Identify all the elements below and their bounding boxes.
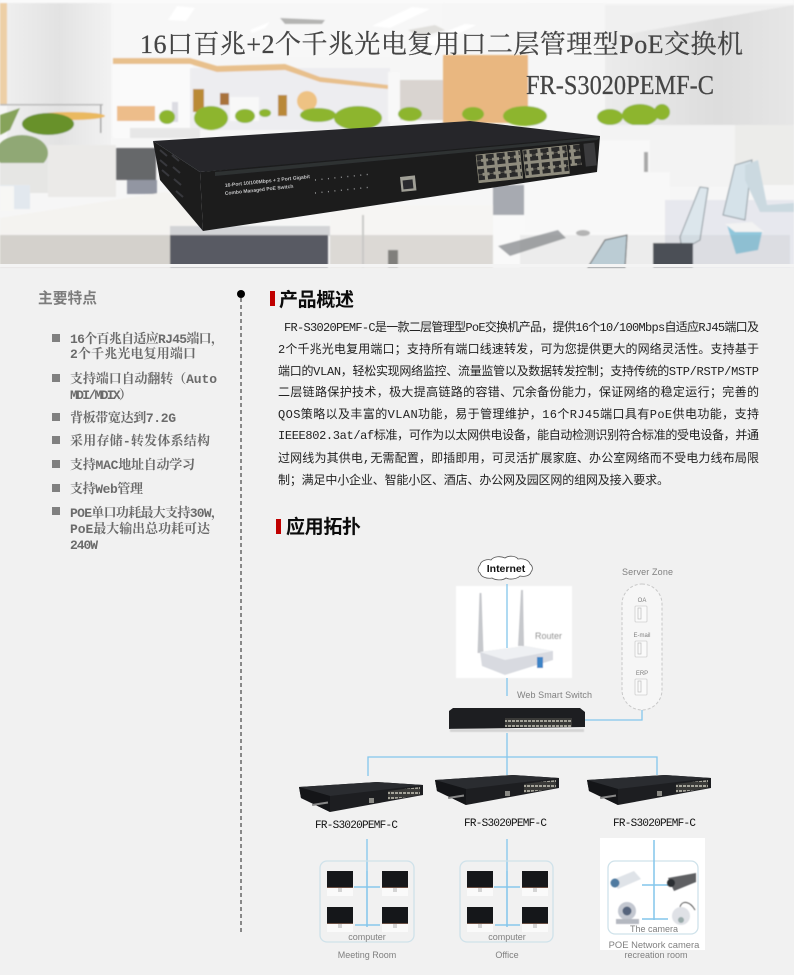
hero office photo bbox=[0, 0, 794, 267]
hero switch: 16-Port 10/100Mbps + 2 Port Gigabit bbox=[225, 174, 311, 189]
overview paragraph: FR-S3020PEMF-C是一款二层管理型PoE交换机产品，提供16个10/100Mbps自适应RJ45端口及 bbox=[284, 319, 759, 335]
hero switch bbox=[153, 121, 600, 231]
office: Office bbox=[495, 950, 519, 960]
server zone: Server Zone bbox=[622, 567, 673, 577]
server zone bbox=[622, 567, 673, 710]
office: computer bbox=[488, 932, 526, 942]
meeting room: Meeting Room bbox=[338, 950, 396, 960]
recreation room cameras: recreation room bbox=[624, 950, 688, 960]
access switch 2 bbox=[435, 775, 559, 830]
features list: PoE最大输出总功耗可达 bbox=[70, 521, 211, 537]
overview paragraph: 二层链路保护技术，极大提高链路的容错、冗余备份能力，保证网络的稳定运行；完善的 bbox=[278, 384, 759, 400]
features list: MDI/MDIX） bbox=[70, 388, 132, 403]
access switch 1: FR-S3020PEMF-C bbox=[315, 820, 398, 832]
recreation room cameras bbox=[600, 838, 705, 960]
features list: 背板带宽达到7.2G bbox=[70, 410, 176, 426]
access switch 2: FR-S3020PEMF-C bbox=[464, 818, 547, 830]
timeline divider bbox=[237, 290, 245, 935]
features list: 16个百兆自适应RJ45端口， bbox=[70, 331, 224, 347]
title: 16口百兆+2个千兆光电复用口二层管理型PoE交换机 bbox=[140, 30, 743, 59]
icon: internet cloud bbox=[478, 556, 532, 580]
hero plants bbox=[0, 104, 670, 178]
recreation room cameras: The camera bbox=[630, 924, 678, 934]
meeting room bbox=[320, 861, 414, 960]
access switch 3 bbox=[587, 775, 711, 830]
meeting room: computer bbox=[348, 932, 386, 942]
features list: 240W bbox=[70, 538, 98, 553]
router panel: Router bbox=[535, 631, 562, 641]
overview paragraph: 2个千兆光电复用端口；支持所有端口线速转发，可为您提供更大的网络灵活性。支持基于 bbox=[278, 341, 759, 357]
icon: internet cloud: Internet bbox=[487, 563, 526, 575]
heading: application topology: 应用拓扑 bbox=[286, 515, 361, 538]
features heading: 主要特点 bbox=[38, 289, 97, 307]
overview paragraph: 端口的VLAN，轻松实现网络监控、流量监管以及数据转发控制；支持传统的STP/RSTP/MSTP bbox=[278, 363, 759, 379]
overview paragraph: 制；满足中小企业、智能小区、酒店、办公网及园区网的组网及接入要求。 bbox=[278, 472, 669, 488]
features list: 支持端口自动翻转（Auto bbox=[70, 371, 217, 387]
overview paragraph: IEEE802.3at/af标准，可作为以太网供电设备，能自动检测识别符合标准的受电设备，并通 bbox=[278, 427, 759, 443]
access switch 1 bbox=[299, 782, 423, 832]
heading: product overview: 产品概述 bbox=[279, 289, 354, 311]
overview paragraph: QOS策略以及丰富的VLAN功能，易于管理维护，16个RJ45端口具有PoE供电功能，支持 bbox=[278, 406, 759, 422]
office bbox=[460, 861, 553, 960]
topology diagram bbox=[299, 556, 711, 960]
features list: POE单口功耗最大支持30W， bbox=[70, 505, 224, 521]
access switch 3: FR-S3020PEMF-C bbox=[613, 818, 696, 830]
overview paragraph bbox=[278, 319, 759, 488]
features list bbox=[52, 331, 224, 553]
router panel bbox=[456, 586, 572, 678]
features list: 采用存储-转发体系结构 bbox=[70, 433, 210, 449]
web smart switch bbox=[449, 690, 592, 732]
title: FR-S3020PEMF-C bbox=[526, 70, 714, 100]
server zone: E-mail bbox=[633, 633, 651, 639]
title bbox=[140, 30, 743, 100]
hero switch: Combo Managed PoE Switch bbox=[225, 184, 294, 197]
connection lines bbox=[354, 584, 657, 927]
sidebar: key features bbox=[38, 289, 224, 553]
features list: 2个千兆光电复用端口 bbox=[70, 346, 196, 362]
web smart switch: Web Smart Switch bbox=[517, 690, 592, 700]
recreation room cameras: POE Network camera bbox=[609, 939, 700, 950]
features list: 支持Web管理 bbox=[70, 481, 143, 497]
overview paragraph: 过网线为其供电,无需配置，即插即用，可灵活扩展家庭、办公室网络而不受电力线布局限 bbox=[278, 450, 759, 466]
features list: 支持MAC地址自动学习 bbox=[70, 457, 195, 473]
server zone: OA bbox=[638, 598, 646, 604]
server zone: ERP bbox=[636, 671, 648, 677]
